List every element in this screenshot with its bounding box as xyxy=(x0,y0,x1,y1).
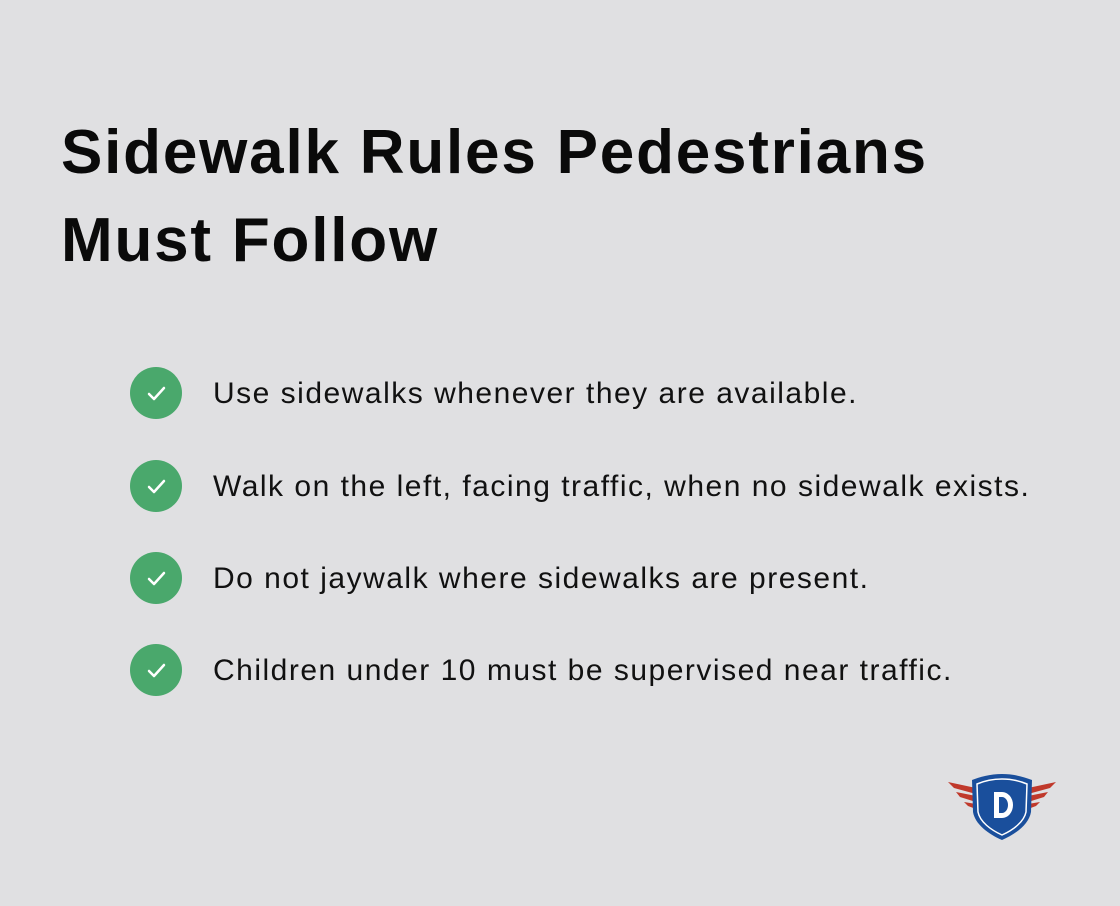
list item 3 xyxy=(130,552,869,604)
title xyxy=(61,118,928,275)
list item 1 xyxy=(130,367,858,419)
list item 4 xyxy=(130,644,953,696)
text: Use sidewalks whenever they are available. xyxy=(213,377,858,410)
icon: check xyxy=(130,552,182,604)
text: Children under 10 must be supervised near traffic. xyxy=(213,654,953,687)
text: Walk on the left, facing traffic, when no sidewalk exists. xyxy=(213,470,1030,503)
title: Must Follow xyxy=(61,206,439,275)
icon: check xyxy=(130,644,182,696)
logo xyxy=(948,774,1056,840)
icon: check xyxy=(130,460,182,512)
title: Sidewalk Rules Pedestrians xyxy=(61,118,928,187)
icon: check xyxy=(130,367,182,419)
list item 2 xyxy=(130,460,1030,512)
text: Do not jaywalk where sidewalks are present. xyxy=(213,562,869,595)
